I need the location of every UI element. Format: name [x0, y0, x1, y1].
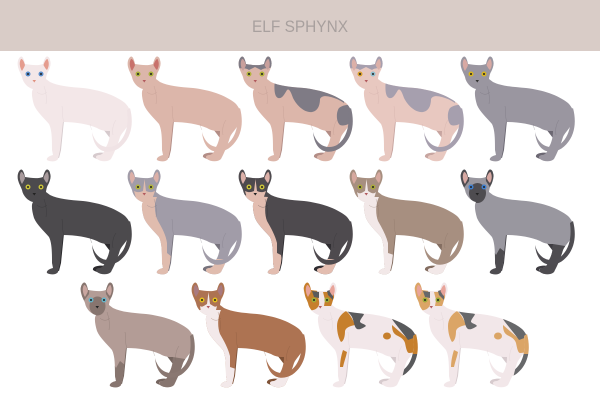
cat: solid grey with yellow eyes [461, 56, 575, 161]
cat: grey with pink bib [128, 169, 242, 278]
cat: solid black with olive eyes [18, 169, 132, 274]
cat: cinnamon with white bib [192, 282, 306, 391]
cat: pink with dark grey patches [238, 56, 353, 162]
cat: white with blue eyes [18, 56, 132, 161]
cat: cream pink with green eyes [128, 56, 242, 161]
cat: beige colourpoint [80, 282, 195, 388]
cat: black with pink bib [239, 169, 353, 278]
cat: light pink with lilac patches [350, 56, 464, 162]
cat: calico light [414, 282, 529, 388]
cat: calico dark [304, 282, 418, 388]
title band [0, 0, 600, 51]
cat: grey colourpoint with blue eyes [460, 170, 575, 274]
cat: taupe with white bib [350, 169, 464, 278]
title: ELF SPHYNX [252, 17, 348, 36]
